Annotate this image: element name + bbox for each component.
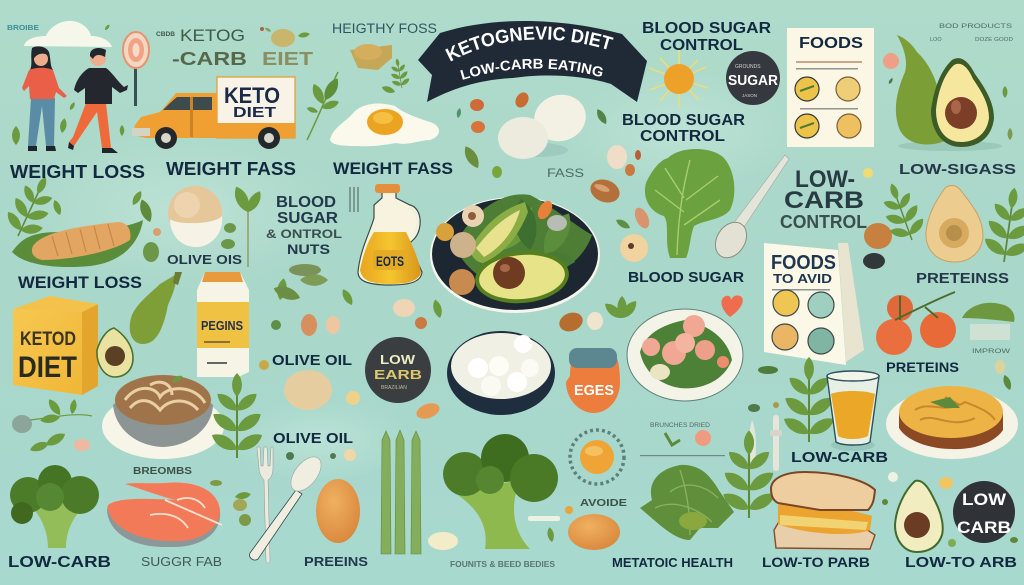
heading: keto carb diet: CBDB	[156, 32, 176, 38]
banner heading text: KETOGNEVIC DIET	[445, 26, 614, 62]
truck label	[224, 83, 280, 121]
scattered seeds and leaves	[456, 90, 531, 178]
illustration: bread on leaf plate	[12, 220, 143, 267]
heading: keto carb diet: -CARB	[172, 49, 247, 69]
illustration: man walking	[68, 48, 128, 153]
scattered leaves centre bottom	[210, 449, 356, 526]
illustration: greens with note	[962, 303, 1014, 355]
label: weight loss second row: WEIGHT LOSS	[18, 273, 142, 292]
badge: low carb right: CARB	[957, 518, 1011, 537]
illustration: nuts pieces	[587, 108, 652, 262]
illustration: noodle stir fry plate	[102, 374, 224, 459]
text: blood sugar and control nuts: & ONTROL	[266, 227, 342, 241]
illustration: egg bottom	[568, 514, 620, 550]
illustration: tomatoes on the vine	[876, 292, 956, 355]
badge: low carb centre: BRAZILIAN	[381, 385, 407, 391]
illustration: nut and berry	[863, 168, 892, 269]
herb icons near people	[12, 101, 124, 145]
illustration: eges jar	[566, 348, 620, 413]
illustration: pear-shaped avocado	[130, 272, 182, 344]
scattered items right of glass	[748, 360, 1013, 412]
illustration: olive oil bottle: EOTS	[376, 253, 404, 269]
icon: target sign	[123, 32, 149, 106]
illustration: nuts near salad	[557, 296, 640, 335]
label: low-to parb: LOW-TO PARB	[762, 554, 870, 570]
illustration: woman	[22, 46, 67, 151]
small label: pass: FASS	[547, 168, 584, 180]
heading: low carb control: CARB	[784, 187, 864, 214]
label: foods seed bodies: FOUNITS & BEED BEDIES	[450, 559, 555, 569]
illustration: pie on plate	[886, 386, 1018, 459]
illustration: two eggs	[498, 89, 591, 159]
heading: low carb control	[780, 166, 867, 232]
illustration: avocado half bottom	[895, 481, 943, 552]
illustration: greens with note: IMPROW	[972, 348, 1011, 355]
label: olive oil upper: OLIVE OIL	[272, 352, 352, 369]
badge: sugar	[726, 51, 780, 105]
heading: low carb control: LOW-	[795, 166, 855, 193]
illustration: fork	[257, 447, 273, 563]
small notes above spinach: BRUNCHES DRIED	[650, 423, 711, 429]
text: blood sugar and control nuts: BLOOD	[276, 194, 336, 211]
heading: blood sugar control top	[642, 20, 771, 54]
icon: sun	[649, 50, 708, 108]
card: foods list	[787, 28, 874, 147]
illustration: tan avocado half with leaves	[873, 177, 1024, 265]
illustration: large leafy green	[645, 149, 734, 258]
notebook: foods to avoid	[764, 243, 864, 365]
tiny decor cluster right	[882, 472, 1018, 547]
illustration: eges jar: EGES	[574, 382, 614, 399]
text: blood sugar and control nuts: SUGAR	[277, 210, 338, 227]
illustration: asparagus spears	[381, 430, 421, 554]
illustration: spinach pile	[640, 465, 734, 540]
badge: sugar: SUGAR	[728, 73, 778, 89]
small tag: foods	[428, 532, 458, 550]
truck label: DIET	[233, 104, 276, 121]
heading: blood sugar control middle	[622, 112, 745, 145]
badge: sugar: GROUNDS	[735, 64, 761, 70]
label: low-carb right: LOW-CARB	[791, 449, 888, 466]
small notes near avocado: DOZE GOOD	[975, 37, 1013, 43]
avocado half on plate	[473, 247, 571, 307]
herb spray lower left	[12, 397, 92, 454]
label: weight loss top left: WEIGHT LOSS	[10, 162, 145, 182]
heading: blood sugar control top: CONTROL	[660, 37, 743, 54]
small notes above spinach	[640, 423, 725, 456]
illustration: sandwich	[771, 472, 875, 549]
illustration: herb stem	[221, 184, 264, 267]
label: sugger fab: SUGGR FAB	[141, 555, 222, 569]
label: low-to arb: LOW-TO ARB	[905, 555, 1017, 571]
heading: low-sigass: LOW-SIGASS	[899, 161, 1016, 178]
text: blood sugar and control nuts	[266, 194, 342, 257]
scattered herbs and nuts mid row	[259, 278, 444, 422]
text: blood sugar and control nuts: NUTS	[287, 241, 330, 257]
notebook: foods to avoid: FOODS	[771, 252, 836, 274]
illustration: mozzarella bowl	[447, 331, 555, 415]
small notes near avocado: BOD PRODUCTS	[939, 24, 1012, 30]
label: weight fass middle: WEIGHT FASS	[166, 159, 296, 179]
illustration: broccoli left	[10, 465, 99, 548]
illustration: spoon	[709, 155, 789, 264]
small label: Bridge: BROIBE	[7, 25, 39, 32]
badge: low carb right	[953, 481, 1015, 543]
label: preeins: PREEINS	[304, 555, 368, 569]
badge: low carb centre	[365, 337, 431, 403]
illustration: milk carton proteins: PEGINS	[201, 318, 243, 333]
label: avoide: AVOIDE	[580, 497, 627, 509]
heading: blood sugar control middle: BLOOD SUGAR	[622, 112, 745, 129]
illustration: fried egg	[330, 104, 439, 146]
badge: sugar: JASON	[742, 93, 757, 98]
seal: circular badge	[570, 430, 624, 484]
heading: keto carb diet: KETOG	[180, 26, 245, 45]
heading: blood sugar low: BLOOD SUGAR	[628, 269, 744, 286]
illustration: seasoned scraps	[350, 44, 412, 95]
badge: low carb centre: LOW	[380, 352, 416, 367]
illustration: greens mixture centre	[272, 264, 355, 307]
illustration: bowl with ball	[168, 186, 222, 247]
illustration: broccoli centre	[443, 434, 558, 549]
heading: healthy loss: HEIGTHY FOSS	[332, 21, 437, 36]
label: olive oil lower: OLIVE OIL	[273, 430, 353, 447]
label: breomes: BREOMBS	[133, 466, 192, 477]
illustration: small avocado half	[97, 328, 133, 377]
heading: low carb control: CONTROL	[780, 212, 867, 232]
illustration: keto box: KETOD	[20, 329, 76, 350]
illustration: juice glass	[827, 371, 879, 451]
label: metatoic health: METATOIC HEALTH	[612, 555, 733, 570]
label: weight fass right: WEIGHT FASS	[333, 159, 453, 178]
label: low-carb bottom left: LOW-CARB	[8, 554, 111, 571]
illustration: keto box	[13, 296, 98, 395]
badge: low carb centre: EARB	[374, 367, 422, 382]
truck label: KETO	[224, 83, 280, 108]
herb sprig beside plate	[209, 373, 265, 458]
illustration: milk carton proteins	[197, 272, 249, 377]
illustration: avocado whole and half	[896, 35, 1002, 151]
banner subheading text: LOW-CARB EATING	[460, 58, 603, 80]
illustration: herb sprig by spinach	[720, 430, 778, 518]
icon: fork tines	[350, 187, 358, 212]
illustration: salmon steak	[107, 482, 222, 547]
icon: heart	[721, 295, 743, 317]
herb sprays left	[0, 168, 161, 262]
small tag and sprout	[528, 506, 573, 543]
illustration: main keto plate	[430, 194, 600, 313]
heading: blood sugar control middle: CONTROL	[640, 128, 725, 145]
illustration: herb branch	[306, 72, 342, 140]
badge: low carb right: LOW	[962, 490, 1007, 509]
illustration: salmon salad bowl	[627, 309, 743, 401]
illustration: brown egg	[316, 479, 360, 543]
heading: preteinss: PRETEINSS	[916, 270, 1009, 287]
label: olive ois: OLIVE OIS	[167, 252, 242, 267]
illustration: keto delivery truck	[132, 77, 295, 149]
decoration: herb scraps top	[104, 24, 310, 47]
heading: keto carb diet: EIET	[262, 49, 313, 69]
heading: keto carb diet	[156, 26, 313, 69]
illustration: herb sprig tall	[781, 357, 837, 442]
illustration: knife and tool	[749, 415, 782, 471]
illustration: keto box: DIET	[18, 351, 77, 384]
banner title	[418, 21, 647, 102]
illustration: round bun	[284, 370, 332, 410]
illustration: spoon bottom	[250, 451, 327, 560]
icon: cloud	[24, 21, 112, 47]
illustration: olive oil bottle	[358, 184, 422, 285]
small notes near avocado: LOO	[930, 37, 942, 43]
card: foods list: FOODS	[799, 35, 863, 52]
notebook: foods to avoid: TO AVID	[773, 271, 832, 286]
label: preteins: PRETEINS	[886, 360, 959, 375]
heading: blood sugar control top: BLOOD SUGAR	[642, 20, 771, 37]
small notes near avocado	[883, 24, 1013, 140]
